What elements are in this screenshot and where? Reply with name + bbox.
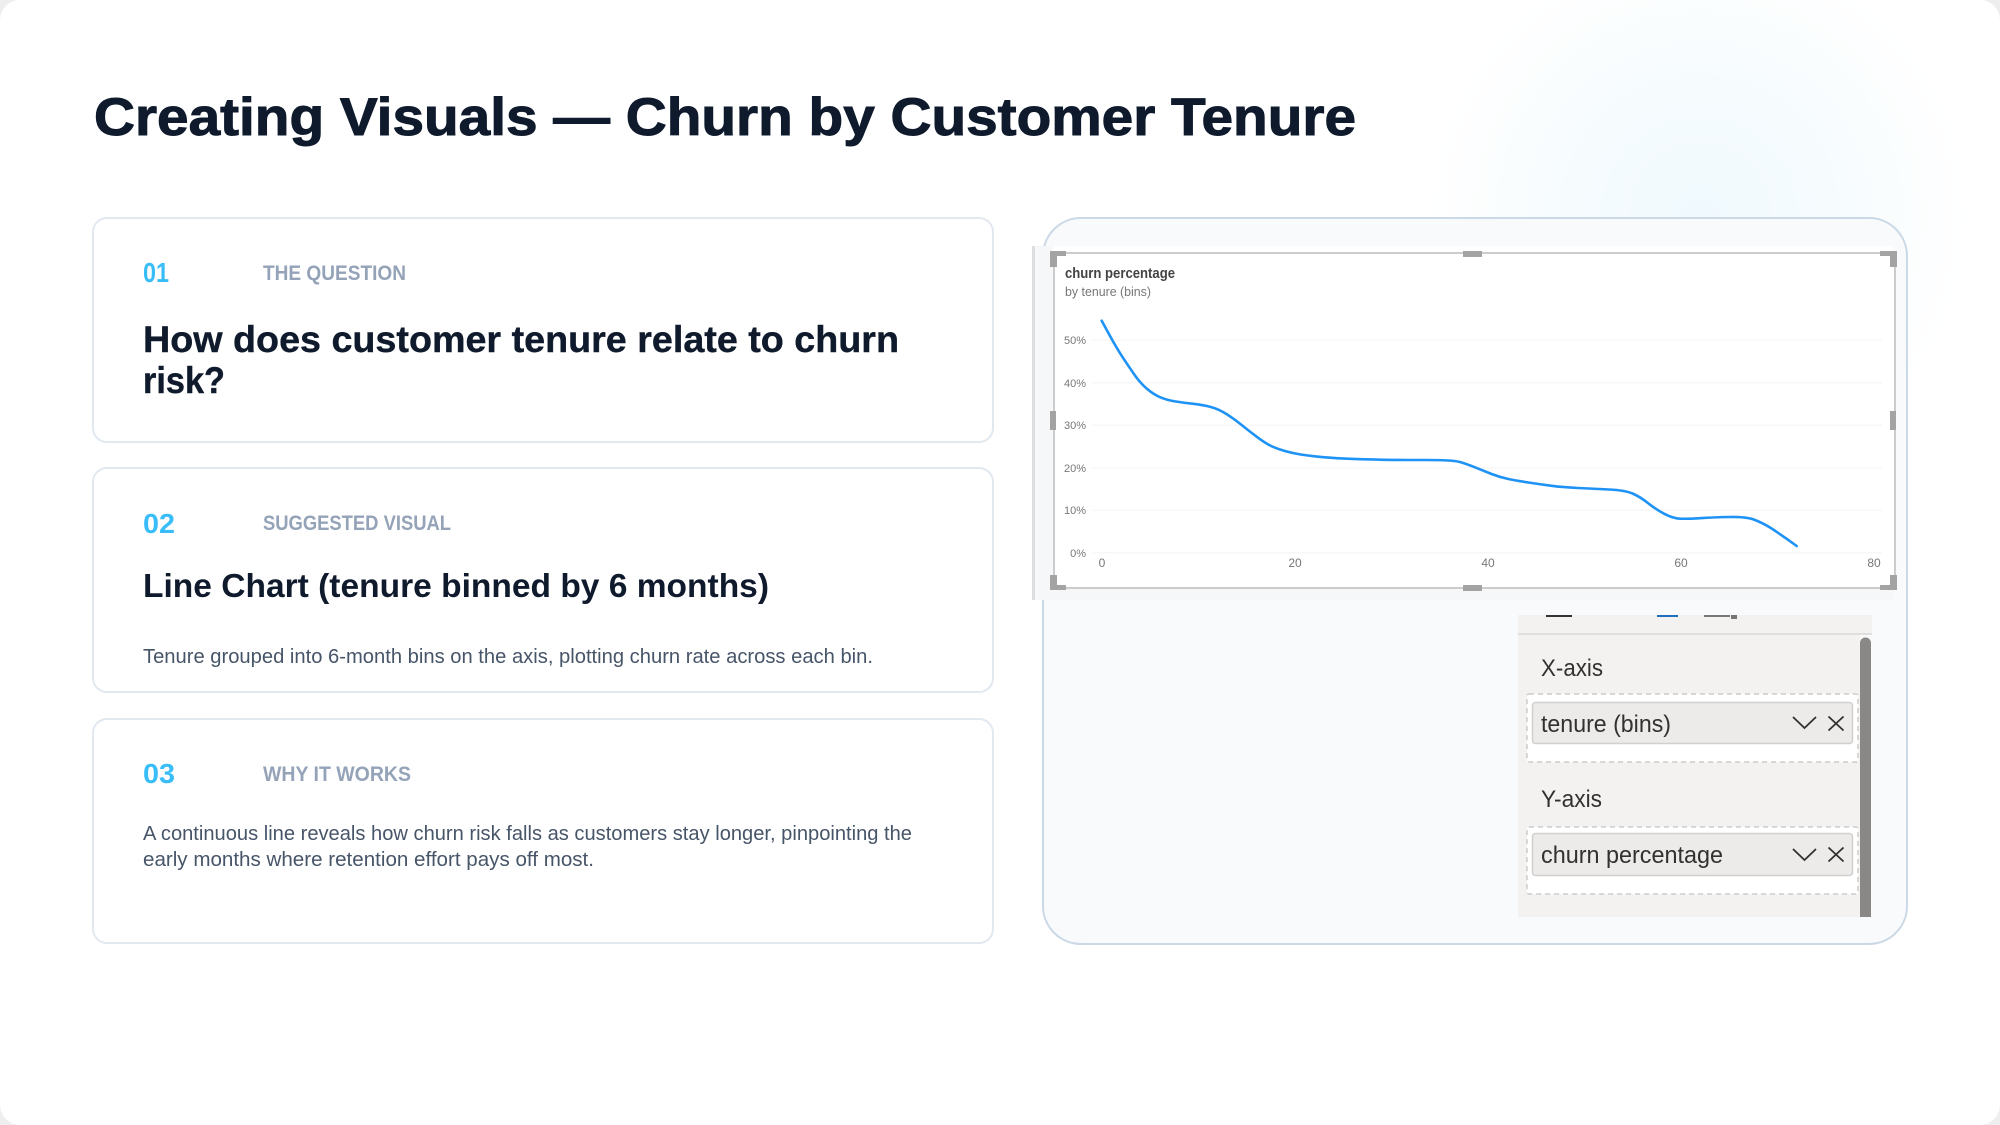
visual description: Tenure grouped into 6-month bins on the axis, plotting churn rate across each bin. (143, 646, 873, 668)
y axis labels: 20% (1064, 463, 1086, 475)
field wells pane (1518, 615, 1872, 917)
label: why it works: WHY IT WORKS (263, 763, 411, 786)
chart title: churn percentage (1065, 265, 1175, 282)
x-axis label: X-axis (1541, 655, 1603, 682)
step number 03: 03 (143, 758, 175, 789)
step number 02: 02 (143, 508, 175, 539)
y-axis field well: churn percentage (1541, 842, 1723, 869)
panel: the question (93, 218, 993, 442)
question heading: risk? (143, 360, 225, 401)
x-axis field well: tenure (bins) (1541, 711, 1671, 738)
x axis labels (1099, 556, 1881, 570)
visual heading: Line Chart (tenure binned by 6 months) (143, 567, 769, 604)
panel: screenshot container (1043, 218, 1907, 944)
step number 01: 01 (143, 257, 169, 288)
selection handles (1050, 251, 1897, 591)
x axis labels: 60 (1674, 556, 1688, 570)
x axis labels: 80 (1867, 556, 1881, 570)
y axis labels: 30% (1064, 420, 1086, 432)
chart subtitle: by tenure (bins) (1065, 284, 1151, 299)
y axis labels: 40% (1064, 378, 1086, 390)
y axis labels: 10% (1064, 505, 1086, 517)
y axis labels: 0% (1070, 548, 1086, 560)
label: suggested visual: SUGGESTED VISUAL (263, 512, 451, 535)
y axis labels (1064, 335, 1086, 560)
y-axis label: Y-axis (1541, 786, 1602, 813)
explanation text: A continuous line reveals how churn risk falls as customers stay longer, pinpointing the (143, 823, 912, 845)
line chart screenshot (1032, 246, 1897, 600)
explanation text: early months where retention effort pays off most. (143, 849, 594, 871)
x axis labels: 40 (1481, 556, 1495, 570)
y-axis field well (1527, 827, 1858, 894)
panel: suggested visual (93, 468, 993, 692)
x-axis field well (1527, 694, 1858, 762)
scrollbar (1860, 638, 1871, 917)
churn line (1102, 321, 1797, 546)
x axis labels: 20 (1288, 556, 1302, 570)
title: Creating Visuals — Churn by Customer Tenure (94, 88, 1356, 147)
label: the question: THE QUESTION (263, 262, 406, 285)
y axis labels: 50% (1064, 335, 1086, 347)
question heading: How does customer tenure relate to churn (143, 319, 899, 360)
x axis labels: 0 (1099, 556, 1106, 570)
panel: why it works (93, 719, 993, 943)
